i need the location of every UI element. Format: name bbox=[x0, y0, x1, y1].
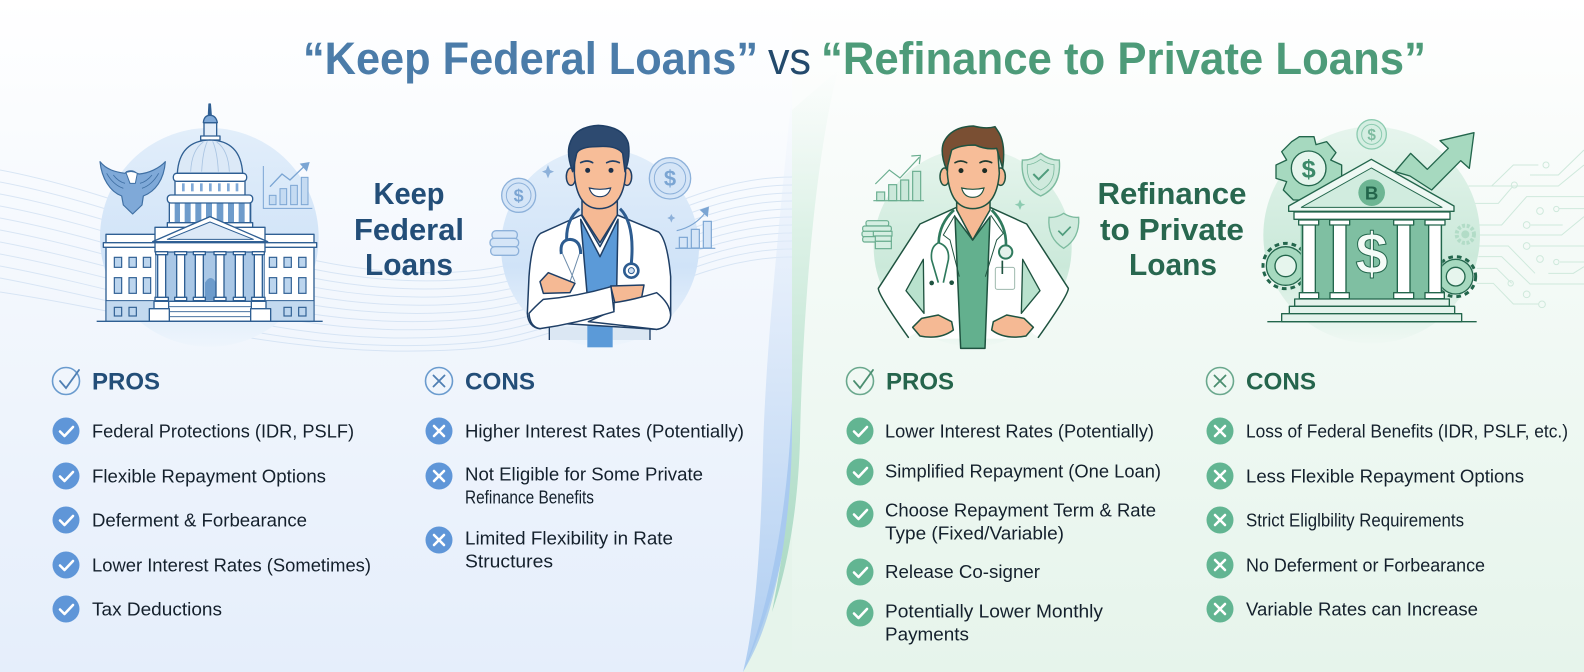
pro item bbox=[846, 418, 1154, 444]
con item: Less Flexible Repayment Options bbox=[1246, 466, 1524, 486]
stethoscope bbox=[939, 210, 1006, 246]
icon: faint gear bbox=[1457, 226, 1474, 243]
section: right pros bbox=[846, 368, 1161, 644]
icon: dollar gear bbox=[1276, 137, 1342, 200]
con item: Limited Flexibility in Rate bbox=[465, 528, 673, 548]
heading: refinance to private loans: to Private bbox=[1100, 212, 1244, 247]
pro item: Type (Fixed/Variable) bbox=[885, 522, 1064, 544]
pro item bbox=[846, 600, 1104, 644]
icon: dollar coins bbox=[490, 158, 691, 255]
crossed arms bbox=[540, 273, 575, 293]
icon: sparkle bbox=[1015, 199, 1025, 210]
icon: dollar coins: $ bbox=[514, 186, 524, 206]
pros header: PROS bbox=[886, 368, 954, 396]
con item: No Deferment or Forbearance bbox=[1246, 554, 1485, 576]
pocket and pen bbox=[995, 267, 1015, 289]
con item bbox=[1206, 418, 1568, 444]
bank building bbox=[1282, 159, 1462, 322]
pro item: Federal Protections (IDR, PSLF) bbox=[92, 420, 354, 442]
decorative circuit lines bbox=[1468, 150, 1584, 308]
panel: right background bbox=[792, 0, 1584, 672]
pros header: PROS bbox=[92, 368, 160, 396]
con item: Variable Rates can Increase bbox=[1246, 598, 1478, 620]
con item bbox=[426, 418, 744, 444]
pro item bbox=[52, 552, 371, 578]
illustration: doctor with crossed arms and money icons bbox=[490, 125, 715, 347]
icon: growth chart bbox=[873, 155, 924, 201]
title: “Refinance to Private Loans” bbox=[821, 33, 1426, 84]
pro item bbox=[846, 500, 1156, 544]
pro item: Choose Repayment Term & Rate bbox=[885, 500, 1156, 520]
coat lapels bbox=[943, 215, 1003, 277]
icon: eagle bbox=[100, 162, 165, 214]
illustration: capitol building with eagle and chart bbox=[97, 104, 323, 347]
pro item bbox=[52, 418, 354, 444]
icon: small bar chart bbox=[675, 207, 715, 248]
decorative wave lines bbox=[0, 170, 792, 351]
pro item: Release Co-signer bbox=[885, 561, 1040, 582]
icon: top dollar coin: $ bbox=[1367, 127, 1376, 144]
heading: keep federal loans: Federal bbox=[354, 212, 464, 247]
dome bbox=[167, 104, 253, 228]
con item bbox=[1206, 506, 1464, 534]
pro item: Lower Interest Rates (Potentially) bbox=[885, 420, 1154, 442]
pro item: Tax Deductions bbox=[92, 598, 222, 620]
doctor body bbox=[878, 207, 1068, 339]
head bbox=[566, 168, 576, 185]
icon: dollar gear: $ bbox=[1302, 155, 1316, 183]
portico bbox=[156, 252, 264, 301]
pro item bbox=[52, 462, 326, 490]
icon: stack of money bbox=[862, 221, 892, 249]
heading: keep federal loans: Keep bbox=[374, 176, 444, 211]
illustration: doctor with hands on hips and shield icons bbox=[862, 126, 1079, 348]
icon: rising arrow bbox=[1395, 133, 1474, 190]
pro item bbox=[846, 458, 1161, 486]
cons header: CONS bbox=[465, 368, 535, 396]
wings bbox=[103, 234, 317, 321]
heading: refinance to private loans: Loans bbox=[1129, 247, 1217, 282]
cons header bbox=[426, 368, 535, 396]
cons header bbox=[1206, 368, 1316, 396]
title: “Keep Federal Loans” bbox=[303, 33, 758, 84]
pro item: Flexible Repayment Options bbox=[92, 466, 326, 486]
pro item: Potentially Lower Monthly bbox=[885, 600, 1104, 622]
con item bbox=[1206, 552, 1485, 578]
illustration: bank with gears and rising arrow bbox=[1263, 120, 1480, 343]
hands bbox=[913, 315, 953, 337]
cons header: CONS bbox=[1246, 368, 1316, 396]
title bbox=[303, 33, 1426, 84]
icon: side gears bbox=[1263, 243, 1476, 297]
title: vs bbox=[768, 33, 811, 84]
heading: refinance to private loans: Refinance bbox=[1098, 176, 1246, 211]
icon: growth chart bbox=[263, 163, 312, 208]
panel: center divider swoosh bbox=[743, 70, 838, 672]
bank building: $ bbox=[1355, 221, 1388, 286]
con item: Higher Interest Rates (Potentially) bbox=[465, 420, 744, 442]
icon: sparkle bbox=[542, 165, 675, 223]
con item bbox=[426, 462, 703, 508]
pro item: Deferment & Forbearance bbox=[92, 510, 307, 530]
icon: dollar coins: $ bbox=[664, 166, 676, 191]
pro item: Simplified Repayment (One Loan) bbox=[885, 460, 1161, 482]
pro item bbox=[846, 558, 1040, 586]
con item: Strict Eliglbility Requirements bbox=[1246, 510, 1464, 530]
icon: top dollar coin bbox=[1357, 120, 1386, 149]
stethoscope bbox=[567, 209, 632, 263]
pros header bbox=[52, 368, 160, 396]
heading: keep federal loans: Loans bbox=[365, 247, 453, 282]
pro item: Payments bbox=[885, 624, 969, 644]
section: right cons bbox=[1206, 368, 1568, 622]
con item: Not Eligible for Some Private bbox=[465, 464, 703, 484]
icon: shields bbox=[1022, 153, 1079, 248]
panel: left background bbox=[0, 0, 792, 672]
bank building: B bbox=[1365, 182, 1378, 203]
doctor body bbox=[549, 322, 650, 340]
section: left pros bbox=[52, 368, 371, 622]
section: left cons bbox=[426, 368, 744, 572]
con item bbox=[1206, 596, 1478, 622]
pro item bbox=[52, 596, 222, 622]
pro item: Lower Interest Rates (Sometimes) bbox=[92, 554, 371, 576]
pro item bbox=[52, 506, 307, 534]
heading: keep federal loans bbox=[354, 176, 464, 282]
con item: Refinance Benefits bbox=[465, 486, 594, 508]
pros header bbox=[846, 368, 954, 396]
con item bbox=[1206, 462, 1524, 490]
con item: Loss of Federal Benefits (IDR, PSLF, etc.) bbox=[1246, 420, 1568, 442]
head bbox=[940, 168, 949, 185]
heading: refinance to private loans bbox=[1098, 176, 1246, 282]
con item: Structures bbox=[465, 550, 553, 572]
con item bbox=[426, 526, 673, 572]
